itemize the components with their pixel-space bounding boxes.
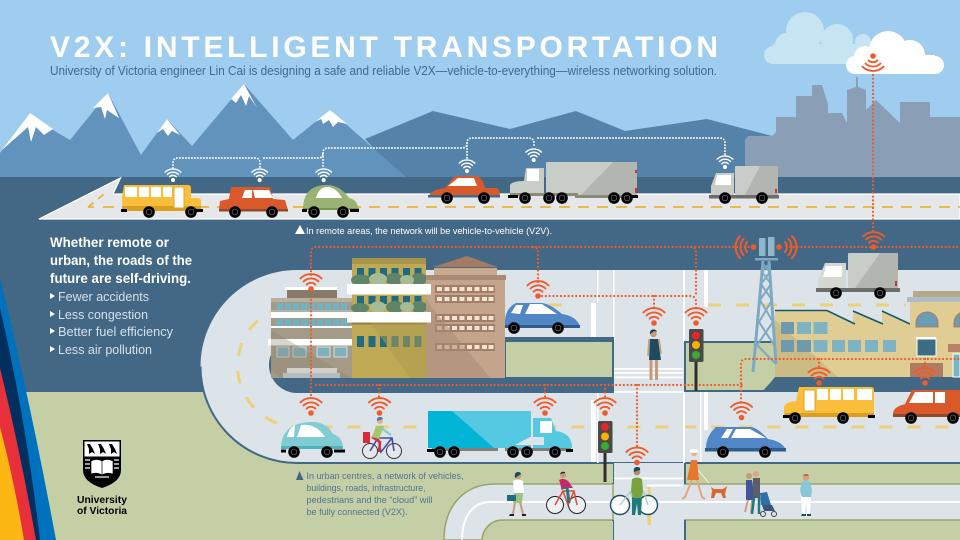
benefits list: Less congestion <box>58 307 148 322</box>
pedestrians: couple with stroller <box>745 471 776 516</box>
building: office <box>268 287 352 378</box>
cell tower <box>753 237 778 372</box>
university name: University <box>77 495 127 506</box>
urban note: In urban centres, a network of vehicles, <box>306 471 464 482</box>
vehicle: blue car upper <box>505 303 580 334</box>
pedestrian: man in white trousers <box>800 474 812 516</box>
urban note: buildings, roads, infrastructure, <box>306 483 426 494</box>
urban note <box>296 471 464 518</box>
subtitle: University of Victoria engineer Lin Cai is designing a safe and reliable V2X—vehicle-to-everything—wireless networking solution. <box>50 64 717 78</box>
tower signal waves <box>736 236 796 258</box>
urban note: pedestrians and the “cloud” will <box>306 495 432 506</box>
urban note: be fully connected (V2X). <box>306 507 408 518</box>
vehicle: red car highway <box>219 187 288 218</box>
white network links <box>173 138 725 168</box>
left colour stripes <box>0 278 56 540</box>
front mountains with snow <box>0 84 406 177</box>
white cloud with network icon <box>846 31 944 74</box>
university name <box>77 495 127 517</box>
vehicle: school bus highway <box>121 185 203 218</box>
crosswalk lines <box>591 270 708 464</box>
vehicle: large truck highway <box>508 162 638 204</box>
urban road <box>200 270 960 463</box>
benefits list: Less air pollution <box>58 342 152 357</box>
green block by tower <box>685 342 776 391</box>
building: factory <box>775 310 910 377</box>
benefits list: Better fuel efficiency <box>58 324 173 339</box>
title: V2X: INTELLIGENT TRANSPORTATION <box>50 31 718 64</box>
lower streets <box>444 463 960 540</box>
self-driving heading: urban, the roads of the <box>50 253 192 268</box>
cyclist with child <box>362 417 402 458</box>
self-driving heading <box>50 235 192 286</box>
benefits list <box>50 289 173 357</box>
traffic light right <box>689 329 704 391</box>
white wifi icons <box>165 149 733 182</box>
pedestrian: woman on phone <box>648 329 661 380</box>
vehicle: school bus urban <box>783 387 875 424</box>
orange wifi icons <box>300 232 936 465</box>
highway road <box>39 178 960 219</box>
vehicle: blue car lower <box>705 427 786 458</box>
university name: of Victoria <box>77 506 127 517</box>
vehicle: cyan truck <box>427 411 573 458</box>
vehicle: red car 2 highway <box>428 176 500 204</box>
vehicle: teal car <box>281 422 345 458</box>
green block centre <box>505 341 613 378</box>
balconies of olive building <box>347 284 431 322</box>
building: brown apartments <box>426 256 506 378</box>
back mountains <box>365 111 800 177</box>
self-driving heading: Whether remote or <box>50 235 170 250</box>
remote note: In remote areas, the network will be vehicle-to-vehicle (V2V). <box>306 226 552 237</box>
dark strip under factory <box>763 377 960 392</box>
benefits list: Fewer accidents <box>58 289 149 304</box>
orange network links <box>311 75 960 448</box>
shield logo <box>83 440 121 488</box>
vehicle: green car highway <box>302 185 359 218</box>
vehicle: grey truck urban <box>816 253 900 299</box>
dark ground band <box>0 177 960 393</box>
pedestrian: man with bicycle <box>610 467 658 515</box>
cyclist woman <box>546 472 586 514</box>
light cloud <box>764 12 871 64</box>
self-driving heading: future are self-driving. <box>50 271 191 286</box>
vehicle: red car urban <box>893 390 960 424</box>
traffic light left <box>598 421 612 482</box>
city skyline <box>745 77 960 177</box>
pedestrian: woman with briefcase <box>507 472 526 516</box>
pedestrian: woman with dog <box>682 449 727 499</box>
building: olive apartments <box>351 258 427 378</box>
inner block dark area <box>269 337 614 393</box>
green ground <box>0 392 960 540</box>
vehicle: small truck highway <box>709 166 779 204</box>
building: right corner <box>907 291 960 377</box>
